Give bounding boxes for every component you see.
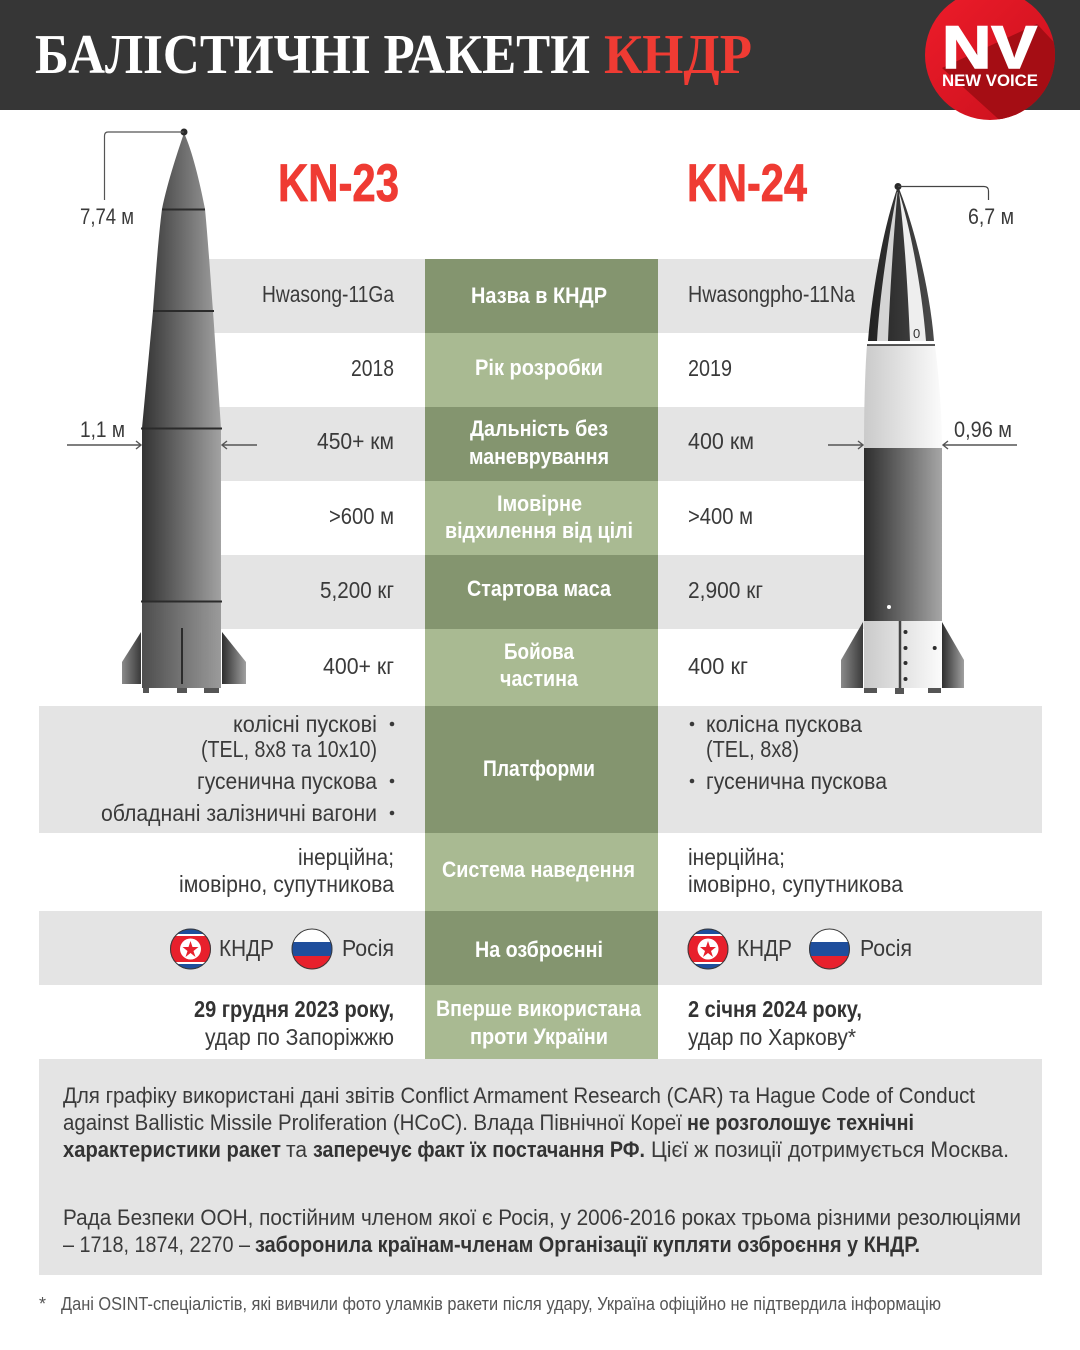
row: warhead: 400 кг bbox=[688, 653, 748, 679]
row: in service: КНДР bbox=[219, 935, 274, 961]
row: name in DPRK: Назва в КНДР bbox=[471, 283, 607, 308]
row: first used against Ukraine bbox=[194, 996, 862, 1050]
row: range: Дальність без bbox=[470, 416, 608, 441]
row: development year: 2019 bbox=[688, 355, 732, 381]
notes panel: та bbox=[286, 1137, 307, 1162]
dimension: KN-24 diameter: 0,96 м bbox=[954, 417, 1012, 442]
dimension: KN-23 diameter: 1,1 м bbox=[80, 417, 125, 442]
row: launch mass: Стартова маса bbox=[467, 576, 612, 601]
row: in service: Росія bbox=[860, 935, 912, 961]
title: БАЛІСТИЧНІ РАКЕТИ bbox=[35, 24, 590, 86]
heading: KN-24: KN-24 bbox=[687, 154, 807, 213]
notes panel: заперечує факт їх постачання РФ. bbox=[313, 1137, 645, 1162]
dimension: KN-23 diameter bbox=[67, 417, 257, 449]
rocket: KN-24: 0 bbox=[913, 326, 920, 341]
row: warhead: Бойова bbox=[504, 639, 575, 664]
row: warhead: 400+ кг bbox=[323, 653, 394, 679]
row: deviation: Імовірне bbox=[497, 491, 582, 516]
header bar bbox=[0, 0, 1080, 110]
row: first used against Ukraine: 2 січня 2024 року, bbox=[688, 996, 862, 1022]
row: name in DPRK: Hwasongpho-11Na bbox=[688, 281, 855, 307]
logo: NV New Voice: NV bbox=[942, 14, 1037, 81]
notes panel: Цієї ж позиції дотримується Москва. bbox=[651, 1137, 1009, 1162]
footnote: * bbox=[39, 1294, 46, 1314]
dimension: KN-24 height bbox=[894, 183, 1014, 229]
row: platforms: (TEL, 8x8 та 10x10) bbox=[201, 736, 377, 762]
dimension: KN-23 height bbox=[80, 128, 188, 229]
row: name in DPRK bbox=[262, 281, 855, 308]
notes panel: заборонила країнам-членам Організації купляти озброєння у КНДР. bbox=[255, 1232, 920, 1257]
row: development year: Рік розробки bbox=[475, 355, 603, 380]
row: guidance system: інерційна; bbox=[298, 844, 394, 870]
row: platforms: гусенична пускова bbox=[706, 768, 887, 794]
heading: KN-23: KN-23 bbox=[278, 154, 399, 213]
row: range: маневрування bbox=[469, 444, 609, 469]
title: КНДР bbox=[604, 24, 752, 86]
rocket: KN-24 bbox=[841, 186, 964, 694]
row: name in DPRK: Hwasong-11Ga bbox=[262, 281, 394, 307]
logo: NV New Voice bbox=[925, 0, 1055, 120]
row: deviation bbox=[329, 491, 753, 543]
icon: Russia flag bbox=[291, 928, 333, 970]
row: first used against Ukraine: 29 грудня 2023 року, bbox=[194, 996, 394, 1022]
row: warhead: частина bbox=[500, 666, 579, 691]
dimension: KN-23 height: 7,74 м bbox=[80, 204, 134, 229]
row: warhead bbox=[323, 639, 748, 691]
row: in service bbox=[170, 928, 912, 970]
row: guidance system: імовірно, супутникова bbox=[179, 871, 394, 897]
row: guidance system: інерційна; bbox=[688, 844, 785, 870]
row: platforms: Платформи bbox=[483, 756, 595, 781]
row: range: 400 км bbox=[688, 428, 754, 454]
notes panel bbox=[63, 1083, 1021, 1257]
icon: Russia flag right bbox=[809, 928, 851, 970]
row: platforms bbox=[101, 711, 887, 826]
row: guidance system: імовірно, супутникова bbox=[688, 871, 903, 897]
row: deviation: відхилення від цілі bbox=[445, 518, 633, 543]
row: first used against Ukraine: проти України bbox=[470, 1024, 608, 1049]
row: first used against Ukraine: удар по Запоріжжю bbox=[205, 1024, 394, 1050]
notes panel: Рада Безпеки ООН, постійним членом якої є Росія, у 2006-2016 роках трьома різними резолюціями bbox=[63, 1205, 1021, 1230]
row: guidance system bbox=[179, 844, 903, 897]
logo: NV New Voice: NEW VOICE bbox=[942, 71, 1038, 90]
row: deviation: >600 м bbox=[329, 503, 394, 529]
dimension: KN-24 height: 6,7 м bbox=[968, 204, 1014, 229]
row: platforms: гусенична пускова bbox=[197, 768, 377, 794]
row: in service: Росія bbox=[342, 935, 394, 961]
row: range bbox=[317, 416, 754, 469]
dimension: KN-24 diameter bbox=[828, 417, 1017, 449]
notes panel: Для графіку використані дані звітів Conflict Armament Research (CAR) та Hague Code of Conduct bbox=[63, 1083, 976, 1108]
row: platforms: колісна пускова bbox=[706, 711, 862, 737]
row: development year bbox=[351, 355, 732, 381]
row: launch mass: 5,200 кг bbox=[320, 577, 394, 603]
row: first used against Ukraine: удар по Харкову* bbox=[688, 1024, 856, 1050]
notes panel: against Ballistic Missile Proliferation (HCoC). Влада Північної Кореї bbox=[63, 1110, 683, 1135]
icon: North Korea flag right bbox=[687, 928, 729, 970]
row: in service: На озброєнні bbox=[475, 937, 603, 962]
icon: North Korea flag bbox=[170, 928, 211, 970]
row: launch mass: 2,900 кг bbox=[688, 577, 763, 603]
row: platforms: колісні пускові bbox=[233, 711, 377, 737]
row: launch mass bbox=[320, 576, 763, 603]
notes panel: характеристики ракет bbox=[63, 1137, 281, 1162]
notes panel: – 1718, 1874, 2270 – bbox=[63, 1232, 250, 1257]
row: deviation: >400 м bbox=[688, 503, 753, 529]
row: development year: 2018 bbox=[351, 355, 394, 381]
row: range: 450+ км bbox=[317, 428, 394, 454]
row: in service: КНДР bbox=[737, 935, 792, 961]
row: platforms: обладнані залізничні вагони bbox=[101, 800, 377, 826]
comparison table backgrounds bbox=[39, 259, 1042, 1275]
row: first used against Ukraine: Вперше використана bbox=[436, 996, 642, 1021]
footnote: Дані OSINT-спеціалістів, які вивчили фото уламків ракети після удару, Україна офіційно не підтвердила інформацію bbox=[61, 1294, 941, 1314]
rocket: KN-23 bbox=[122, 133, 246, 693]
notes panel: не розголошує технічні bbox=[687, 1110, 914, 1135]
row: guidance system: Система наведення bbox=[442, 857, 635, 882]
row: platforms: (TEL, 8x8) bbox=[706, 736, 799, 762]
